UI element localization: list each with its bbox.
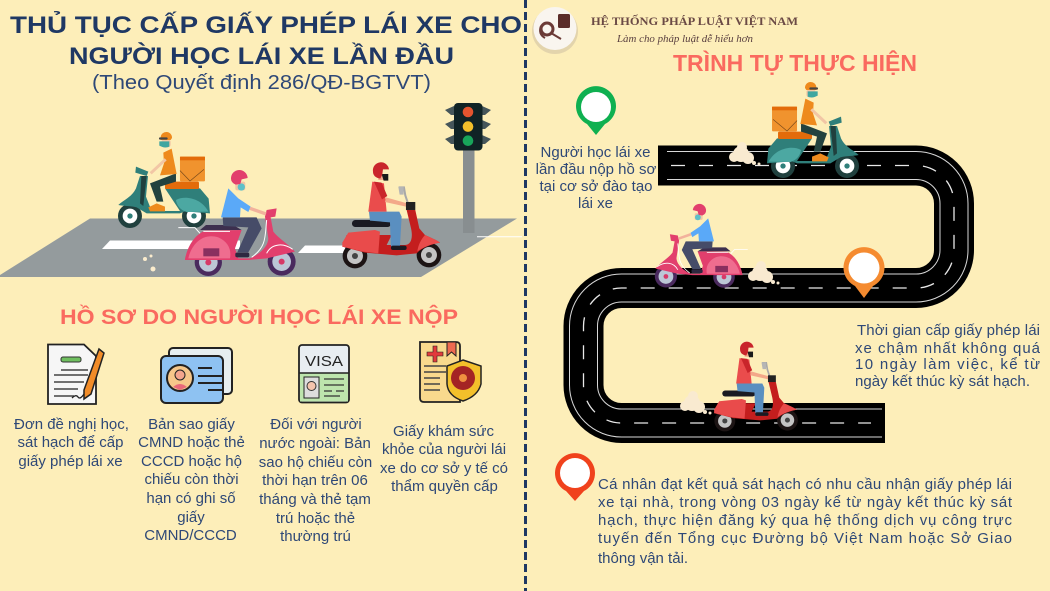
divider <box>524 0 527 591</box>
text: step 2: Thời gian cấp giấy phép lái <box>857 322 1040 339</box>
text: application form: Đơn đề nghị học, <box>14 416 129 433</box>
text: step 3: xe tại nhà, trong vòng 03 ngày kể từ ngày kết thúc kỳ sát <box>598 494 1013 511</box>
text: step 2: xe chậm nhất không quá <box>855 340 1041 357</box>
winding road <box>569 152 968 437</box>
icon: visa: VISA <box>305 353 343 370</box>
icon: visa <box>299 345 349 402</box>
text: step 3: hạch, thực hiện đăng ký qua hệ thống dịch vụ công trực <box>598 512 1012 529</box>
traffic light <box>445 103 491 233</box>
text: ID copy: CCCD hoặc hộ <box>141 453 242 470</box>
red scooter on road <box>714 342 798 431</box>
text: foreigners: sao hộ chiếu còn <box>259 454 372 471</box>
dust clouds <box>680 142 780 414</box>
text: foreigners: thời hạn trên 06 <box>262 472 368 489</box>
text: health certificate <box>380 423 508 495</box>
teal scooter on road <box>767 82 859 178</box>
title <box>10 10 522 70</box>
icon: medical certificate <box>420 342 481 402</box>
text: health certificate: xe do cơ sở y tế có <box>380 460 508 477</box>
text: ID copy: Bản sao giấy <box>148 416 235 433</box>
icon: application form <box>48 344 104 404</box>
pin: green <box>576 86 616 135</box>
text: step 3 <box>598 476 1013 567</box>
text: foreigners: tháng và thẻ tạm <box>259 491 371 508</box>
pin: orange <box>844 247 884 298</box>
teal delivery scooter <box>118 132 210 228</box>
text: foreigners <box>259 416 372 545</box>
icon: ID card <box>161 348 232 403</box>
text: step 2: ngày kết thúc kỳ sát hạch. <box>855 373 1030 390</box>
text: ID copy: hạn có ghi số <box>146 490 236 507</box>
text: foreigners: Đối với người <box>270 416 362 433</box>
text: health certificate: Giấy khám sức <box>393 423 494 440</box>
text: ID copy <box>138 416 245 544</box>
text: health certificate: khỏe của người lái <box>382 441 506 458</box>
brand name: HỆ THỐNG PHÁP LUẬT VIỆT NAM <box>591 13 798 28</box>
title: THỦ TỤC CẤP GIẤY PHÉP LÁI XE CHO <box>10 10 522 39</box>
subtitle: (Theo Quyết định 286/QĐ-BGTVT) <box>92 72 431 94</box>
text: foreigners: thường trú <box>280 528 351 545</box>
heading: procedure: TRÌNH TỰ THỰC HIỆN <box>673 49 917 76</box>
brand slogan: Làm cho pháp luật dễ hiểu hơn <box>616 34 753 45</box>
pin: red <box>555 453 595 501</box>
text: step 1: lái xe <box>578 195 613 212</box>
pink scooter on road <box>655 204 748 288</box>
text: application form <box>14 416 129 470</box>
pink scooter <box>178 170 296 276</box>
red scooter <box>342 162 441 268</box>
text: application form: giấy phép lái xe <box>18 453 123 470</box>
heading: documents: HỒ SƠ DO NGƯỜI HỌC LÁI XE NỘP <box>60 304 458 329</box>
text: step 2 <box>855 322 1041 390</box>
illustration: street with scooters <box>0 103 522 277</box>
text: ID copy: giấy <box>177 509 205 526</box>
text: step 3: thông vận tải. <box>598 550 688 567</box>
text: step 2: 10 ngày làm việc, kể từ <box>855 356 1040 373</box>
title: NGƯỜI HỌC LÁI XE LẦN ĐẦU <box>69 42 454 70</box>
text: step 3: tuyến đến Tổng cục Đường bộ Việt Nam hoặc Sở Giao <box>598 530 1012 547</box>
logo <box>532 7 578 54</box>
text: step 1 <box>536 144 657 212</box>
text: ID copy: CMND hoặc thẻ <box>138 434 245 451</box>
text: step 1: lần đầu nộp hồ sơ <box>536 161 657 178</box>
text: foreigners: trú hoặc thẻ <box>276 510 355 527</box>
road surface <box>0 218 517 277</box>
text: step 1: tại cơ sở đào tạo <box>539 178 653 195</box>
text: step 3: Cá nhân đạt kết quả sát hạch có nhu cầu nhận giấy phép lái <box>598 476 1012 493</box>
text: application form: sát hạch để cấp <box>18 434 123 451</box>
text: ID copy: chiếu còn thời <box>144 471 239 488</box>
text: step 1: Người học lái xe <box>541 144 650 161</box>
text: foreigners: nước ngoài: Bản <box>259 435 371 452</box>
text: health certificate: thẩm quyền cấp <box>391 478 498 495</box>
text: ID copy: CMND/CCCD <box>144 527 237 544</box>
